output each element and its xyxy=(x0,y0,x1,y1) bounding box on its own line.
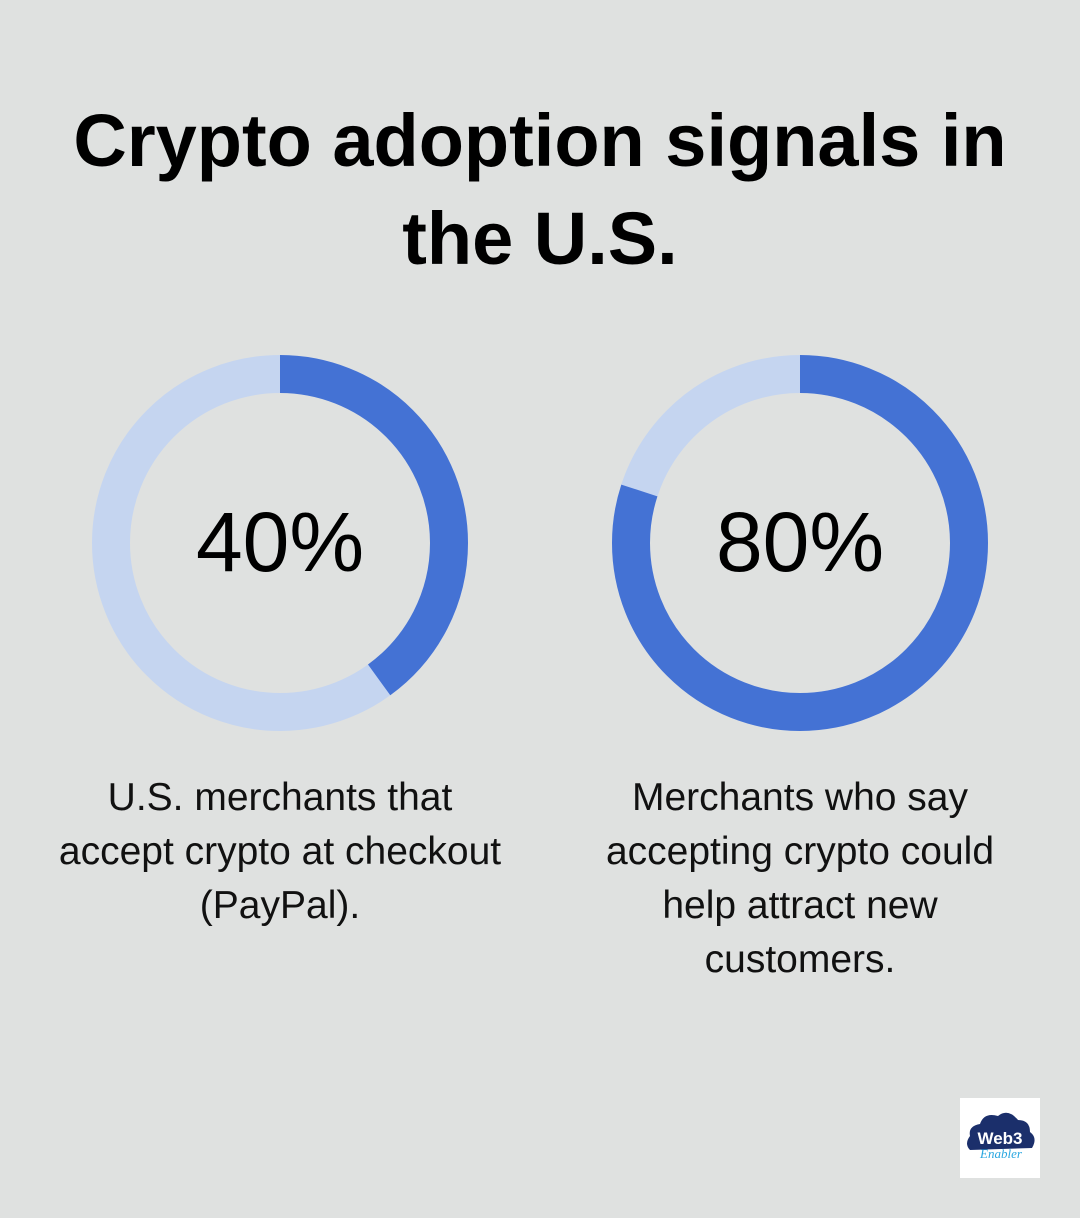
caption: right: Merchants who say accepting crypto could help attract new customers. xyxy=(606,776,994,981)
caption: left: accept crypto at checkout xyxy=(59,830,501,873)
caption: left: U.S. merchants that xyxy=(108,776,452,819)
logo: Web3 Enabler xyxy=(960,1098,1040,1178)
donut: 80%: 80% xyxy=(716,495,884,589)
logo: Web3 Enabler: Enabler xyxy=(979,1146,1023,1161)
donut: 40%: 40% xyxy=(196,495,364,589)
title: the U.S. xyxy=(402,197,678,280)
donut: 40% xyxy=(111,374,449,712)
title xyxy=(73,99,1007,280)
caption: left: (PayPal). xyxy=(200,884,360,927)
logo: Web3 Enabler: Web3 xyxy=(977,1129,1023,1148)
caption: left xyxy=(59,776,501,927)
title: Crypto adoption signals in xyxy=(73,99,1007,182)
donut: 80% xyxy=(631,374,969,712)
